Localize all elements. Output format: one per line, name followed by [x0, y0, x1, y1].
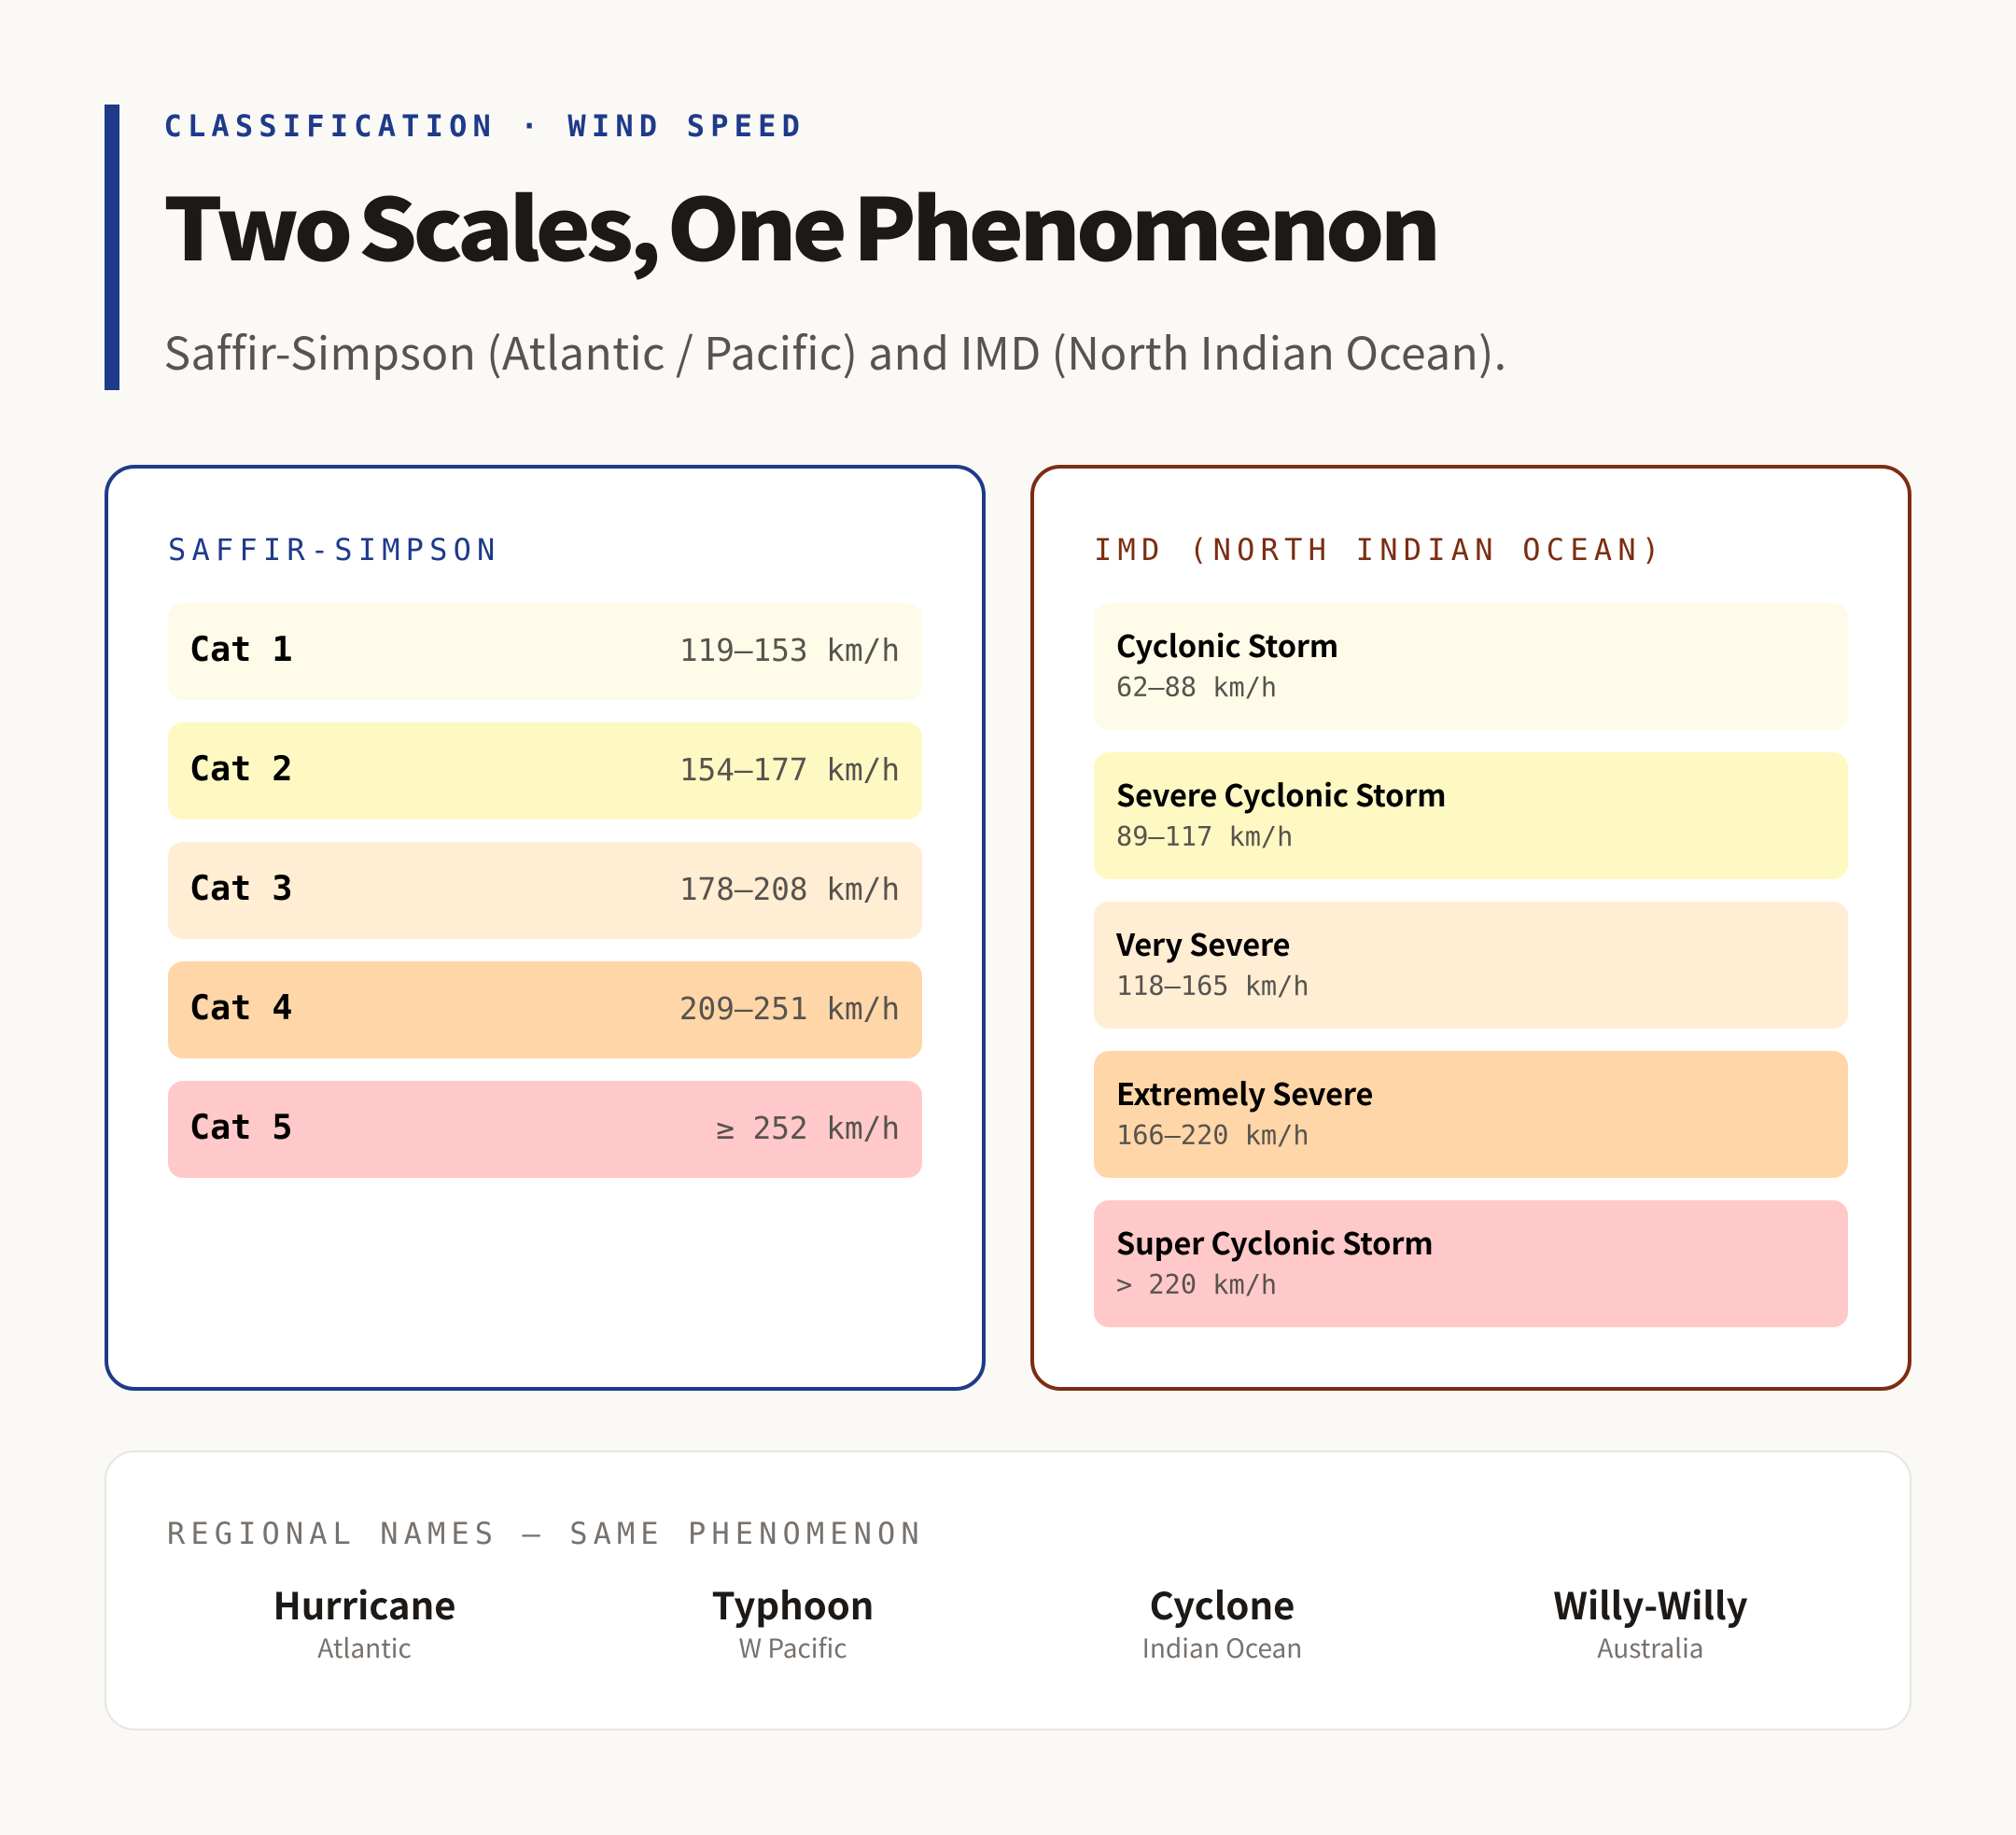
row: Cat 3 — [168, 842, 922, 939]
row: Cat 4 — [168, 961, 922, 1058]
row: Cyclonic Storm — [1094, 603, 1848, 730]
panel heading: Saffir-Simpson: SAFFIR-SIMPSON — [168, 532, 501, 567]
row: Extremely Severe: 166–220 km/h — [1116, 1119, 1309, 1151]
row: Severe Cyclonic Storm — [1094, 752, 1848, 879]
row: Extremely Severe: Extremely Severe — [1116, 1071, 1373, 1114]
row: Cat 5: Cat 5 — [189, 1107, 292, 1147]
region: Willy-Willy: Willy-Willy — [1553, 1576, 1748, 1631]
panel: IMD — [1030, 465, 1911, 1391]
row: Cat 3: Cat 3 — [189, 868, 292, 908]
row: Cat 2 — [168, 722, 922, 819]
regional names heading: REGIONAL NAMES — SAME PHENOMENON — [167, 1516, 925, 1551]
row: Cat 5 — [168, 1081, 922, 1178]
subtitle: Saffir-Simpson (Atlantic / Pacific) and IMD (North Indian Ocean). — [164, 317, 1506, 383]
row: Very Severe — [1094, 902, 1848, 1029]
row: Cat 2: Cat 2 — [189, 749, 292, 789]
row: Cat 1: Cat 1 — [189, 629, 292, 669]
row: Cat 5: ≥ 252 km/h — [716, 1111, 900, 1146]
row: Super Cyclonic Storm: Super Cyclonic Storm — [1116, 1220, 1434, 1264]
row: Cyclonic Storm: 62–88 km/h — [1116, 671, 1277, 703]
region: Cyclone: Cyclone — [1150, 1576, 1295, 1631]
region: Willy-Willy — [1553, 1576, 1748, 1666]
row: Severe Cyclonic Storm: Severe Cyclonic Storm — [1116, 772, 1446, 816]
panel: Saffir-Simpson — [105, 465, 986, 1391]
row: Very Severe: Very Severe — [1116, 921, 1290, 965]
eyebrow label: CLASSIFICATION · WIND SPEED — [164, 108, 805, 144]
header accent bar — [105, 105, 119, 390]
region: Typhoon — [712, 1576, 874, 1666]
row: Cat 1 — [168, 603, 922, 700]
row: Severe Cyclonic Storm: 89–117 km/h — [1116, 820, 1293, 852]
row: Cyclonic Storm: Cyclonic Storm — [1116, 623, 1338, 666]
row: Cat 4: Cat 4 — [189, 988, 292, 1028]
panel heading: IMD: IMD (NORTH INDIAN OCEAN) — [1094, 532, 1665, 567]
region: Typhoon: Typhoon — [712, 1576, 874, 1631]
title: Two Scales, One Phenomenon — [163, 161, 1436, 286]
row: Cat 4: 209–251 km/h — [679, 991, 900, 1027]
row: Cat 1: 119–153 km/h — [679, 633, 900, 668]
row: Cat 2: 154–177 km/h — [679, 752, 900, 788]
region: Willy-Willy: Australia — [1597, 1629, 1704, 1666]
region: Cyclone: Indian Ocean — [1142, 1629, 1302, 1666]
row: Extremely Severe — [1094, 1051, 1848, 1178]
region: Hurricane: Atlantic — [317, 1629, 412, 1666]
region: Hurricane: Hurricane — [273, 1576, 455, 1631]
panel: regional names — [105, 1450, 1911, 1730]
row: Super Cyclonic Storm: > 220 km/h — [1116, 1268, 1277, 1300]
region: Cyclone — [1142, 1576, 1302, 1666]
region: Hurricane — [273, 1576, 455, 1666]
row: Very Severe: 118–165 km/h — [1116, 970, 1309, 1002]
row: Cat 3: 178–208 km/h — [679, 872, 900, 907]
row: Super Cyclonic Storm — [1094, 1200, 1848, 1327]
region: Typhoon: W Pacific — [738, 1629, 847, 1666]
